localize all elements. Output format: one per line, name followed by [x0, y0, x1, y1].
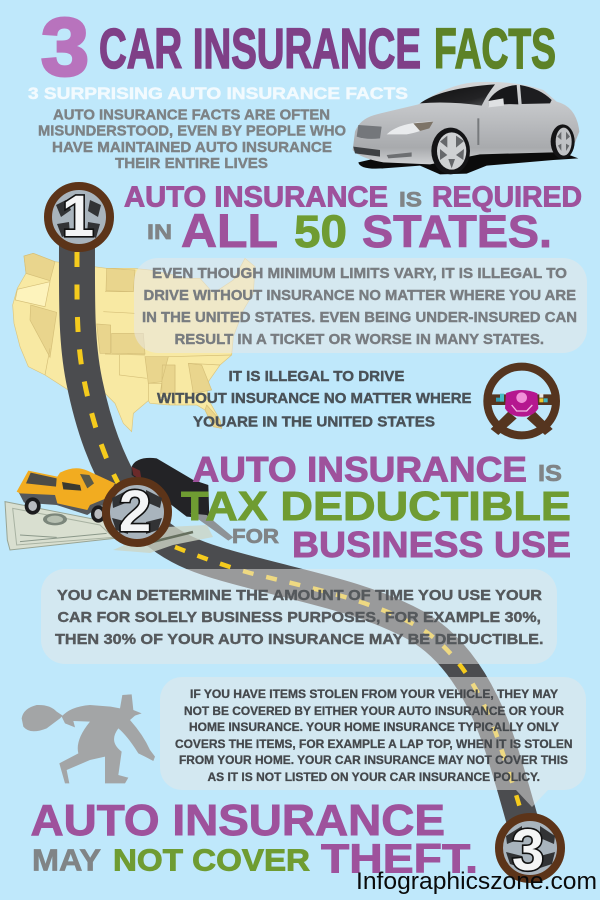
text: business use: CAR FOR SOLELY BUSINESS PURPOSES, FOR EXAMPLE 30%, [58, 610, 541, 626]
icon: road, second stretch [137, 512, 530, 848]
heading: required in all 50 states: 50 [294, 206, 347, 257]
text: minimum limits: IN THE UNITED STATES. EVEN BEING UNDER-INSURED CAN [142, 310, 577, 326]
heading: tax deductible [181, 450, 571, 565]
text: stolen items [175, 687, 572, 784]
heading: tax deductible: IS [538, 460, 562, 486]
text: minimum limits [142, 266, 577, 348]
text: illegal to drive [157, 369, 472, 430]
title: CAR INSURANCE [99, 17, 421, 81]
heading: required in all 50 states [124, 182, 582, 257]
text: stolen items: COVERS THE ITEMS, FOR EXAMPLE A LAP TOP, WHEN IT IS STOLEN [175, 737, 572, 751]
text: illegal to drive: WITHOUT INSURANCE NO MATTER WHERE [157, 391, 472, 407]
title [41, 2, 556, 93]
panel: stolen items [160, 677, 586, 807]
icon: US map [13, 253, 255, 432]
heading: tax deductible: TAX DEDUCTIBLE [181, 483, 571, 529]
text: stolen items: FROM YOUR HOME. YOUR CAR INSURANCE MAY NOT COVER THIS [179, 753, 568, 767]
watermark: Infographicszone.com [356, 868, 597, 895]
icon: road, first stretch [77, 240, 137, 512]
text: stolen items: NOT BE COVERED BY EITHER YOUR AUTO INSURANCE OR YOUR [184, 704, 564, 718]
text: minimum limits: DRIVE WITHOUT INSURANCE NO MATTER WHERE YOU ARE [144, 288, 576, 304]
text: business use [55, 588, 544, 648]
text: minimum limits: RESULT IN A TICKET OR WORSE IN MANY STATES. [174, 332, 544, 348]
heading: required in all 50 states: IN [147, 221, 172, 244]
heading: required in all 50 states: REQUIRED [432, 182, 582, 214]
heading: required in all 50 states: STATES. [362, 206, 552, 257]
intro text: MISUNDERSTOOD, EVEN BY PEOPLE WHO [38, 124, 346, 140]
text: business use: THEN 30% OF YOUR AUTO INSURANCE MAY BE DEDUCTIBLE. [55, 632, 544, 648]
heading: may not cover theft: AUTO INSURANCE [30, 796, 445, 845]
badge: number 3 [499, 817, 561, 883]
text: illegal to drive: YOUARE IN THE UNITED STATES [193, 414, 435, 430]
text: stolen items: HOME INSURANCE. YOUR HOME INSURANCE TYPICALLY ONLY [189, 720, 559, 734]
panel: business use [41, 569, 557, 664]
panel: minimum limits [134, 258, 587, 353]
heading: tax deductible: FOR [232, 526, 280, 548]
heading: required in all 50 states: ALL [181, 204, 278, 257]
icon: key fob [132, 458, 233, 541]
intro text [38, 108, 346, 172]
text: stolen items: IF YOU HAVE ITEMS STOLEN FROM YOUR VEHICLE, THEY MAY [190, 687, 558, 701]
text: illegal to drive: IT IS ILLEGAL TO DRIVE [228, 369, 405, 385]
badge: number 2: 2 [119, 479, 151, 544]
text: minimum limits: EVEN THOUGH MINIMUM LIMITS VARY, IT IS ILLEGAL TO [152, 266, 567, 282]
intro text: AUTO INSURANCE FACTS ARE OFTEN [53, 108, 330, 124]
heading: may not cover theft: MAY [32, 842, 101, 878]
intro text: HAVE MAINTAINED AUTO INSURANCE [52, 140, 332, 156]
icon: silver car [353, 82, 579, 174]
badge: number 3: 3 [512, 818, 544, 883]
heading: required in all 50 states: AUTO INSURANCE [124, 182, 388, 214]
icon: yellow pickup truck [17, 468, 115, 523]
heading: may not cover theft [30, 796, 478, 882]
heading: tax deductible: AUTO INSURANCE [192, 450, 527, 490]
badge: number 1 [48, 184, 110, 249]
heading: may not cover theft: THEFT. [321, 836, 478, 882]
text: business use: YOU CAN DETERMINE THE AMOUNT OF TIME YOU USE YOUR [57, 588, 543, 604]
subtitle: 3 SURPRISING AUTO INSURANCE FACTS [28, 84, 408, 103]
heading: tax deductible: BUSINESS USE [292, 524, 571, 565]
title: 3 [41, 2, 89, 93]
text: stolen items: AS IT IS NOT LISTED ON YOUR CAR INSURANCE POLICY. [208, 770, 540, 784]
badge: number 2 [106, 479, 168, 544]
icon: money under road [113, 525, 213, 553]
heading: required in all 50 states: IS [399, 188, 422, 212]
icon: steering wheel [487, 367, 556, 435]
badge: number 1: 1 [62, 184, 94, 249]
intro text: THEIR ENTIRE LIVES [115, 156, 268, 172]
icon: thief silhouette [22, 694, 155, 783]
icon: money [5, 502, 123, 550]
heading: may not cover theft: NOT COVER [113, 842, 310, 878]
